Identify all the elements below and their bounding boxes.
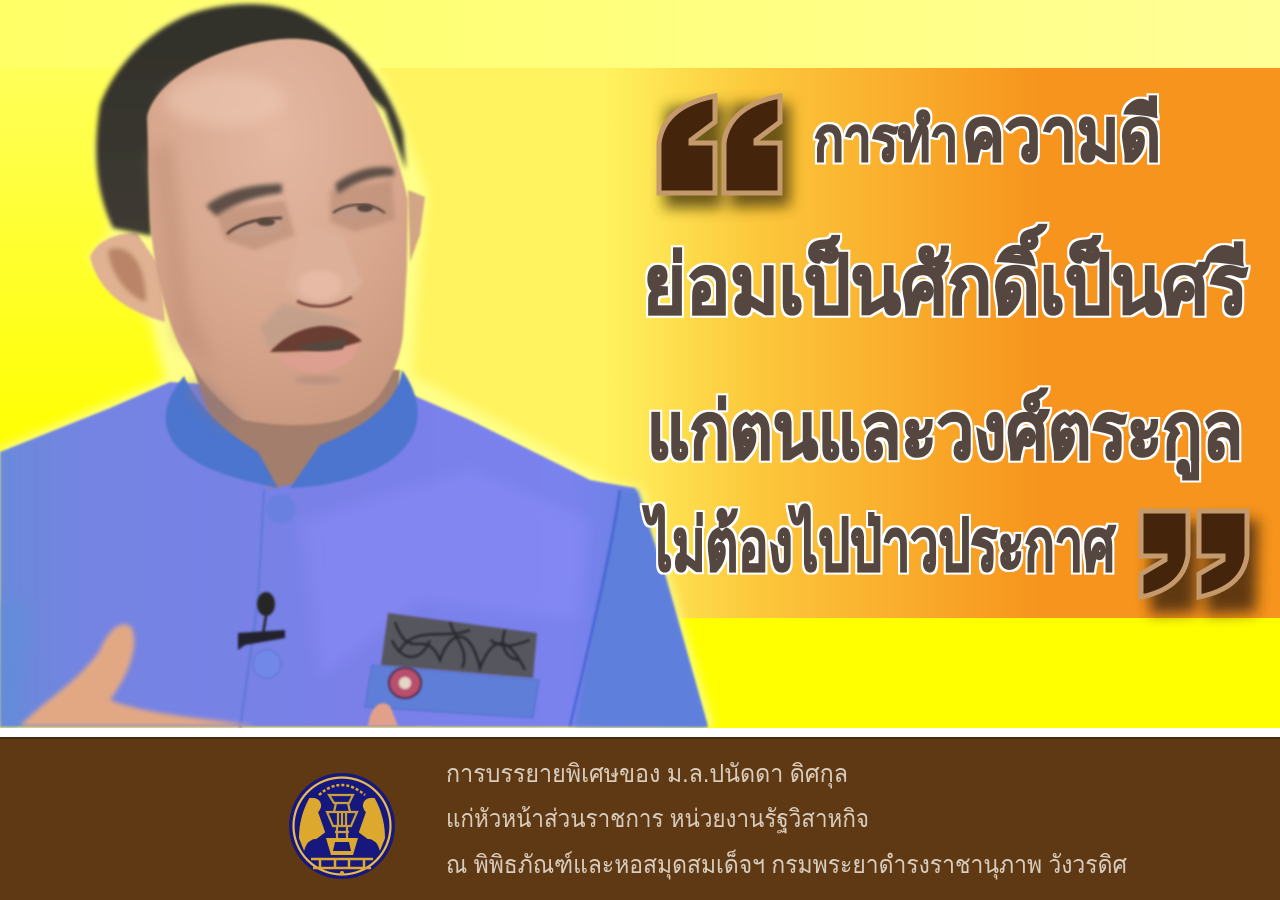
mouth interior xyxy=(296,337,347,351)
jacket highlights xyxy=(300,470,590,680)
emblem left lion xyxy=(300,799,324,848)
emblem right lion xyxy=(360,799,384,848)
jacket sleeve shading xyxy=(575,490,706,726)
left eye line xyxy=(227,218,282,234)
left eye xyxy=(230,218,282,236)
emblem base xyxy=(311,859,373,868)
face xyxy=(147,39,408,425)
footer text line 1: การบรรยายพิเศษของ ม.ล.ปนัดดา ดิศกุล xyxy=(446,760,848,789)
jacket placket xyxy=(240,490,264,728)
jacket xyxy=(0,382,708,727)
footer panel xyxy=(0,737,1280,900)
headline: line 1 small: การทำ xyxy=(814,106,958,173)
left eyebrow xyxy=(206,184,282,216)
opening quotation mark xyxy=(659,96,790,208)
nose tip highlight xyxy=(298,270,342,300)
upper lip xyxy=(270,326,362,352)
left ear inner xyxy=(108,248,146,302)
headline: line 1 large: ความดี xyxy=(962,93,1161,176)
emblem pedestal xyxy=(326,838,358,855)
footer text line 2: แก่หัวหน้าส่วนราชการ หน่วยงานรัฐวิสาหกิจ xyxy=(446,805,869,833)
right ear xyxy=(408,190,425,262)
chin shadow xyxy=(294,376,342,384)
nose bridge xyxy=(285,222,362,307)
forehead highlight xyxy=(165,74,285,126)
emblem flames xyxy=(319,785,365,795)
right eyebrow xyxy=(335,167,394,194)
footer text line 3: ณ พิพิธภัณฑ์และหอสมุดสมเด็จฯ กรมพระยาดำรงราชานุภาพ วังวรดิศ xyxy=(446,849,1127,880)
pocket square xyxy=(381,613,537,678)
neck xyxy=(190,360,400,488)
fingertip xyxy=(368,703,398,726)
left ear xyxy=(90,233,165,322)
left iris xyxy=(257,218,275,226)
right eye socket xyxy=(330,180,395,232)
emblem urn xyxy=(327,795,357,838)
moustache area xyxy=(260,303,360,350)
nose shadow xyxy=(297,297,352,307)
lower lip xyxy=(278,342,358,373)
right eye xyxy=(333,205,383,218)
left eye socket xyxy=(215,200,295,250)
opening quote glyph shapes xyxy=(659,96,780,193)
sleeve seam xyxy=(570,490,620,726)
white divider strip xyxy=(0,728,1280,737)
government emblem xyxy=(289,773,395,879)
closing quote glyph shapes xyxy=(1141,511,1247,597)
temple shade xyxy=(150,140,215,370)
jaw shadow xyxy=(190,375,240,430)
quote shadow xyxy=(664,104,790,208)
left hand xyxy=(20,624,255,726)
hair xyxy=(96,4,406,236)
emblem bottom mark xyxy=(340,871,344,875)
closing quote shadow xyxy=(1150,520,1258,614)
lapel pin xyxy=(389,668,421,698)
yellow halo around figure xyxy=(0,1,714,728)
portrait of speaker xyxy=(0,1,714,728)
right iris xyxy=(357,204,373,212)
jacket left shadow xyxy=(0,600,30,727)
pocket xyxy=(365,665,539,718)
right eye line xyxy=(333,205,385,213)
closing quotation mark xyxy=(1141,511,1258,614)
lower button xyxy=(253,650,281,678)
microphone xyxy=(238,592,285,650)
upper button xyxy=(266,494,296,524)
collar xyxy=(166,370,418,488)
